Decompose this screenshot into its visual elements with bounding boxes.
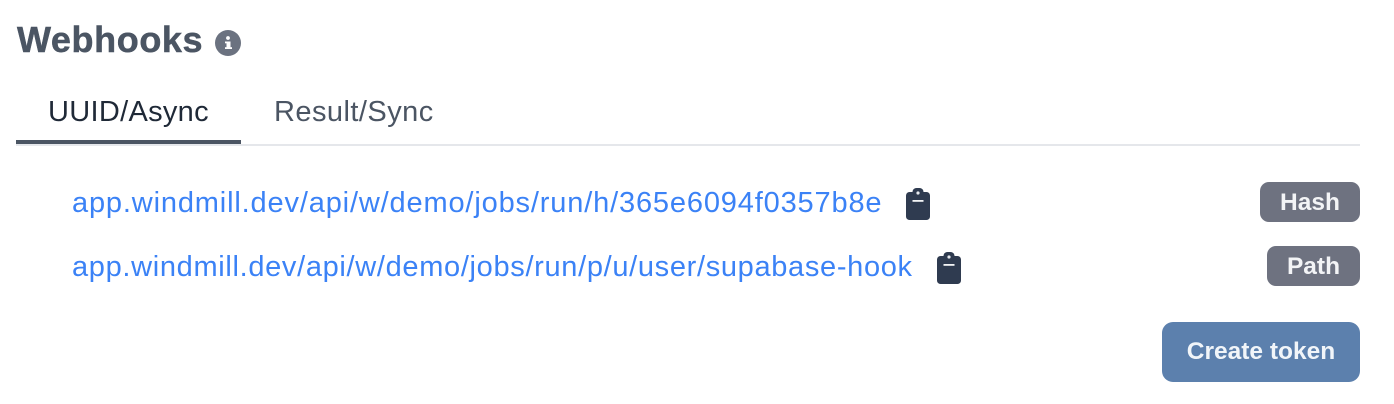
icon: info <box>215 30 241 56</box>
badge: Path: Path <box>1287 253 1340 280</box>
link: hash webhook url: app.windmill.dev/api/w/demo/jobs/run/h/365e6094f0357b8e <box>72 187 882 219</box>
badge: Path <box>1267 246 1360 286</box>
button: Create token <box>1162 322 1360 382</box>
tab: Result/Sync: Result/Sync <box>274 96 434 128</box>
tab divider <box>16 144 1360 146</box>
tab: UUID/Async active: UUID/Async <box>48 96 209 128</box>
icon: clipboard path <box>937 252 961 284</box>
heading: Webhooks: Webhooks <box>17 19 203 60</box>
button: Create token: Create token <box>1187 338 1335 365</box>
badge: Hash <box>1260 182 1360 222</box>
badge: Hash: Hash <box>1280 189 1340 216</box>
active tab underline <box>16 140 241 144</box>
icon: clipboard hash <box>906 188 930 220</box>
link: path webhook url: app.windmill.dev/api/w/demo/jobs/run/p/u/user/supabase-hook <box>72 251 913 283</box>
